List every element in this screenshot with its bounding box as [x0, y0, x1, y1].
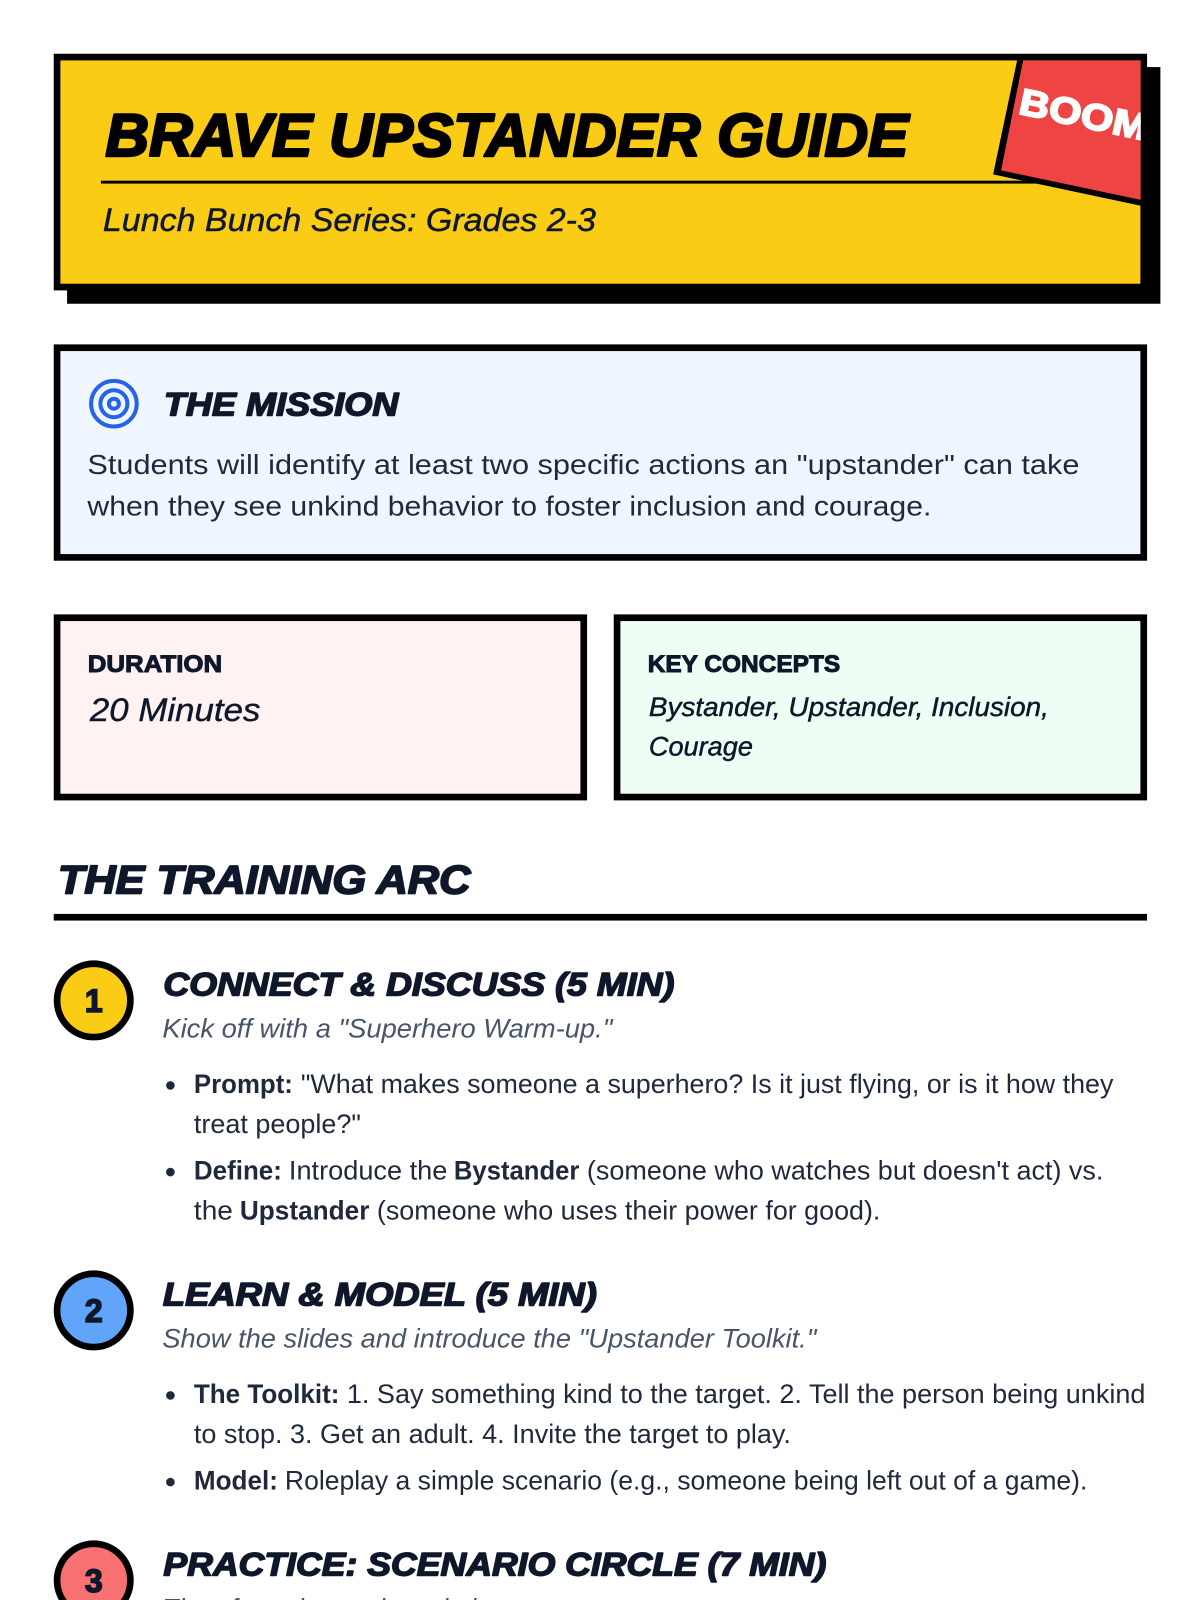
- header rule: [101, 181, 1101, 184]
- step 2 subtitle: Show the slides and introduce the "Upstander Toolkit.": [162, 1324, 818, 1354]
- duration label: DURATION: [88, 651, 222, 678]
- key concepts label: KEY CONCEPTS: [648, 651, 840, 678]
- step 1: connect and discuss: [57, 964, 1114, 1226]
- step 2 number badge: [57, 1274, 130, 1347]
- step 3 number badge: 3: [85, 1563, 103, 1599]
- step 1 bullet: prompt: Prompt:: [194, 1069, 293, 1099]
- panel: the mission: [57, 348, 1144, 557]
- subtitle: Lunch Bunch Series: Grades 2-3: [103, 202, 596, 238]
- step 1 bullet: define: [166, 1156, 1103, 1226]
- step 1 bullet: prompt: "What makes someone a superhero? Is it just flying, or is it how they: [301, 1069, 1114, 1099]
- step 2 heading: LEARN & MODEL (5 MIN): [163, 1276, 597, 1312]
- mission text: [86, 449, 1079, 522]
- step 1 bullet: prompt: treat people?": [194, 1109, 361, 1139]
- key concepts values: Courage: [649, 732, 753, 762]
- mission text: when they see unkind behavior to foster inclusion and courage.: [86, 491, 931, 522]
- step 2 bullet: model: Roleplay a simple scenario (e.g., someone being left out of a game).: [285, 1465, 1087, 1495]
- step 2 bullet: the toolkit: [166, 1379, 1145, 1449]
- step 1 subtitle: Kick off with a "Superhero Warm-up.": [162, 1014, 614, 1044]
- duration value: 20 Minutes: [89, 692, 260, 728]
- step 2 bullet: the toolkit: 1. Say something kind to the target. 2. Tell the person being unkind: [347, 1379, 1145, 1409]
- step 1 bullet: prompt: [166, 1069, 1114, 1139]
- step 1 number badge: 1: [85, 983, 103, 1019]
- key concepts values: [649, 692, 1049, 762]
- step 3 heading: PRACTICE: SCENARIO CIRCLE (7 MIN): [163, 1546, 826, 1582]
- key concepts values: Bystander, Upstander, Inclusion,: [649, 692, 1049, 722]
- step 1 bullet: define: Bystander: [454, 1155, 580, 1185]
- step 1 number badge: [57, 964, 130, 1037]
- step 1 bullet: define: Define:: [194, 1155, 282, 1185]
- step 2 bullet: the toolkit: to stop. 3. Get an adult. 4. Invite the target to play.: [194, 1419, 791, 1449]
- panel: duration: [57, 618, 584, 797]
- section heading: the training arc: THE TRAINING ARC: [58, 859, 472, 903]
- step 3: practice scenario circle: [57, 1544, 826, 1600]
- mission text: Students will identify at least two specific actions an "upstander" can take: [87, 449, 1079, 480]
- step 2 number badge: 2: [85, 1293, 103, 1329]
- step 1 bullet: define: (someone who uses their power for good).: [377, 1195, 880, 1225]
- step 1 bullet: define: the: [194, 1195, 233, 1225]
- step 1 bullet: define: Upstander: [240, 1195, 370, 1225]
- icon: target: [91, 381, 137, 426]
- step 2 bullet: the toolkit: The Toolkit:: [194, 1379, 339, 1409]
- step 1 bullet: define: (someone who watches but doesn't act) vs.: [587, 1155, 1103, 1185]
- boom badge: [993, 60, 1151, 206]
- boom text: BOOM: [1016, 81, 1151, 148]
- title: BRAVE UPSTANDER GUIDE: [105, 102, 910, 169]
- section heading: the training arc: [54, 859, 1147, 921]
- mission heading: THE MISSION: [164, 386, 399, 422]
- step 2 bullet: model: Model:: [194, 1465, 278, 1495]
- step 1 bullet: define: Introduce the: [289, 1155, 447, 1185]
- panel: key concepts: [617, 618, 1144, 797]
- step 1 heading: CONNECT & DISCUSS (5 MIN): [163, 966, 674, 1002]
- header panel: [57, 57, 1160, 304]
- step 3 number badge: [57, 1544, 130, 1600]
- step 2: learn and model: [57, 1274, 1145, 1496]
